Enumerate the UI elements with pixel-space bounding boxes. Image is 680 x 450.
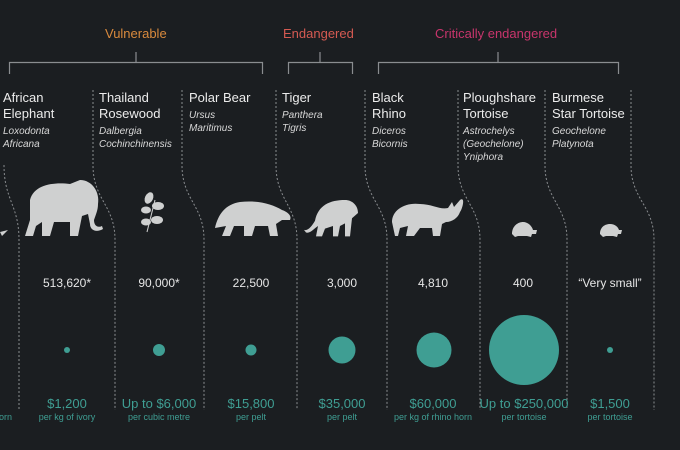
- icon: burmese tortoise: [600, 224, 622, 237]
- silhouettes: [0, 180, 622, 237]
- text: per kg of rhino horn: [394, 412, 472, 422]
- text: per tortoise: [587, 412, 633, 422]
- icon: tiger: [304, 200, 358, 236]
- text: per tortoise: [501, 412, 547, 422]
- name: Thailand Rosewood: [99, 90, 172, 150]
- text: 4,810: [418, 276, 448, 290]
- name: Ploughshare Tortoise: Astrochelys: [463, 126, 515, 137]
- name: Thailand Rosewood: Cochinchinensis: [99, 139, 172, 150]
- icon: elephant: [25, 180, 103, 236]
- name: Tiger: Panthera: [282, 110, 323, 121]
- name: Tiger: [282, 90, 323, 134]
- icon: polar bear: [215, 201, 291, 236]
- text: per cubic metre: [128, 412, 190, 422]
- icon: rosewood leaf: [141, 191, 164, 232]
- icon: partial horn: [0, 230, 8, 236]
- name: African Elephant: Africana: [3, 139, 40, 150]
- name: Burmese Star Tortoise: Star Tortoise: [552, 106, 625, 121]
- name: Polar Bear: Polar Bear: [189, 90, 250, 105]
- icon: ploughshare tortoise: [512, 222, 537, 237]
- heading: Endangered: Endangered: [283, 26, 354, 41]
- name: Ploughshare Tortoise: Tortoise: [463, 106, 509, 121]
- name: Ploughshare Tortoise: [462, 90, 536, 163]
- name: Thailand Rosewood: Thailand: [99, 90, 149, 105]
- text: 90,000*: [138, 276, 180, 290]
- name: Polar Bear: Ursus: [189, 110, 215, 121]
- name: Polar Bear: Maritimus: [189, 123, 232, 134]
- text: 3,000: [327, 276, 357, 290]
- name: Black Rhino: Black: [372, 90, 404, 105]
- text: 22,500: [233, 276, 269, 290]
- text: Up to $250,000: [480, 396, 568, 411]
- text: per pelt: [327, 412, 357, 422]
- name: Polar Bear: [189, 90, 250, 134]
- name: African Elephant: Loxodonta: [3, 126, 50, 137]
- circle chart: [64, 315, 613, 385]
- name: Burmese Star Tortoise: Geochelone: [552, 126, 606, 137]
- name: Black Rhino: [372, 90, 408, 150]
- name: Burmese Star Tortoise: Burmese: [552, 90, 604, 105]
- numbers: 513,620*: [43, 276, 91, 290]
- name: Black Rhino: Bicornis: [372, 139, 408, 150]
- text: Up to $6,000: [122, 396, 196, 411]
- text: $60,000: [410, 396, 456, 411]
- name: Thailand Rosewood: Dalbergia: [99, 126, 142, 137]
- name: Black Rhino: Diceros: [372, 126, 406, 137]
- name: Tiger: Tigris: [282, 123, 306, 134]
- text: 400: [513, 276, 533, 290]
- heading: Vulnerable: Vulnerable: [105, 26, 167, 41]
- name: Burmese Star Tortoise: [552, 90, 625, 150]
- heading: Critically endangered: Critically endangered: [435, 26, 557, 41]
- name: Ploughshare Tortoise: Ploughshare: [463, 90, 536, 105]
- text: $35,000: [318, 396, 366, 411]
- name: Burmese Star Tortoise: Platynota: [552, 139, 594, 150]
- text: per pelt: [236, 412, 266, 422]
- brackets: [8, 52, 620, 74]
- icon: rhino: [392, 199, 463, 236]
- name: African Elephant: Elephant: [3, 106, 54, 121]
- prices: $1,200: [47, 396, 87, 411]
- text: $1,500: [590, 396, 630, 411]
- name: Black Rhino: Rhino: [372, 106, 406, 121]
- text: per kg of ivory: [39, 412, 95, 422]
- text: “Very small”: [578, 276, 642, 290]
- name: Tiger: Tiger: [282, 90, 311, 105]
- name: Ploughshare Tortoise: Yniphora: [463, 152, 503, 163]
- name: African Elephant: African: [3, 90, 43, 105]
- name: Ploughshare Tortoise: (Geochelone): [463, 139, 524, 150]
- name: Thailand Rosewood: Rosewood: [99, 106, 160, 121]
- text: $15,800: [228, 396, 274, 411]
- name: African Elephant: [2, 90, 54, 150]
